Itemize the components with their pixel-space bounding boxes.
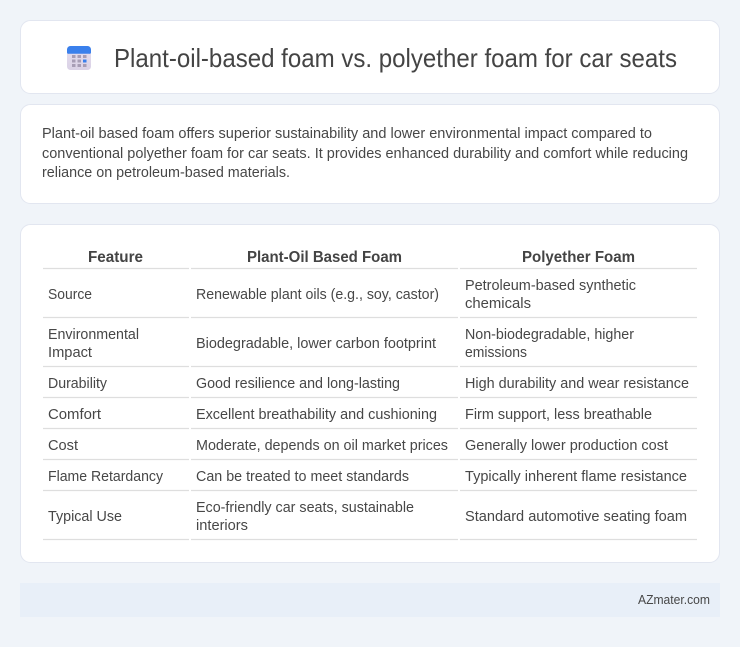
panel: comparison table [20,224,720,562]
row: typical use: Typical Use [48,509,122,525]
summary text: Plant-oil based foam offers superior sustainability and lower environmental impact compared to [42,126,652,142]
panel: summary [20,104,720,204]
row: cost: Cost [48,438,78,454]
summary text [42,126,688,181]
summary text: conventional polyether foam for car seats. It provides enhanced durability and comfort while reducing [42,146,688,162]
row: durability: High durability and wear resistance [465,376,689,392]
table header row [88,249,635,266]
table header row: Plant-Oil Based Foam [247,249,402,266]
row: typical use: Standard automotive seating foam [465,509,687,525]
row: environmental impact: Impact [48,345,92,361]
footer bar [20,583,720,617]
panel: header [20,20,720,94]
row: flame retardancy: Flame Retardancy [48,469,164,485]
row: durability: Durability [48,376,108,392]
row: source: chemicals [465,296,531,312]
row: source: Petroleum-based synthetic [465,278,636,294]
row: typical use [48,500,687,534]
row: environmental impact: Non-biodegradable, higher [465,327,634,343]
row: comfort: Firm support, less breathable [465,407,652,423]
row: cost: Moderate, depends on oil market prices [196,438,448,454]
footer credit: AZmater.com [638,592,710,607]
row: cost [48,438,668,454]
icon: calendar [67,46,91,70]
title: Plant-oil-based foam vs. polyether foam for car seats [114,43,677,73]
row: cost: Generally lower production cost [465,438,668,454]
row: environmental impact: emissions [465,345,527,361]
row: comfort [48,407,652,423]
row: flame retardancy [48,469,687,485]
row: typical use: Eco-friendly car seats, sustainable [196,500,414,516]
row: comfort: Comfort [48,407,101,423]
row: environmental impact: Biodegradable, lower carbon footprint [196,336,436,352]
table header row: Polyether Foam [522,249,635,266]
row: flame retardancy: Typically inherent flame resistance [465,469,687,485]
row: durability [48,376,689,392]
table header row: Feature [88,249,143,266]
row: environmental impact [48,327,634,361]
row: typical use: interiors [196,518,248,534]
row: source [48,278,636,312]
summary text: reliance on petroleum-based materials. [42,165,290,181]
row: comfort: Excellent breathability and cushioning [196,407,437,423]
row: flame retardancy: Can be treated to meet standards [196,469,409,485]
row: source: Renewable plant oils (e.g., soy, castor) [196,287,439,303]
row: environmental impact: Environmental [48,327,139,343]
row: source: Source [48,287,92,303]
row: durability: Good resilience and long-lasting [196,376,400,392]
